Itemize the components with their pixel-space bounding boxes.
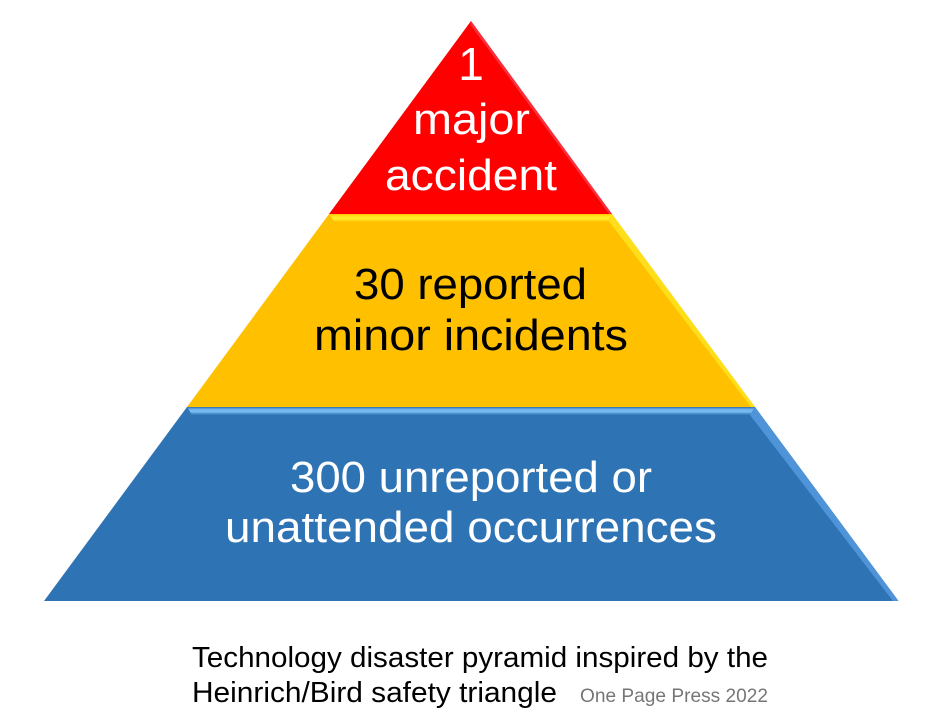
caption line 1: Technology disaster pyramid inspired by the (192, 642, 768, 674)
yellow tier bevel: top (329, 214, 612, 222)
tier label: 30 reported: 30 reported (354, 260, 587, 309)
tier label: 1: 1 (458, 38, 484, 90)
panel: yellow middle tier (187, 214, 755, 407)
panel: blue base tier (44, 407, 898, 601)
caption (192, 642, 768, 709)
red tier bevel: right edge (470, 21, 612, 214)
tier label: unattended occurrences: unattended occurrences (225, 503, 717, 552)
credit: One Page Press 2022 (580, 685, 768, 707)
blue tier bevel: top (187, 407, 755, 415)
yellow tier bevel: right edge (608, 214, 755, 407)
panel: red top tier (329, 21, 612, 214)
tier label: minor incidents: minor incidents (314, 311, 628, 360)
tier label: major: major (413, 95, 530, 144)
tier label: accident: accident (385, 151, 557, 200)
tier label: 300 unreported: 300 unreported or (290, 453, 652, 502)
blue tier bevel: right edge (750, 407, 898, 601)
caption line 2: Heinrich/Bird safety triangle (192, 677, 557, 709)
